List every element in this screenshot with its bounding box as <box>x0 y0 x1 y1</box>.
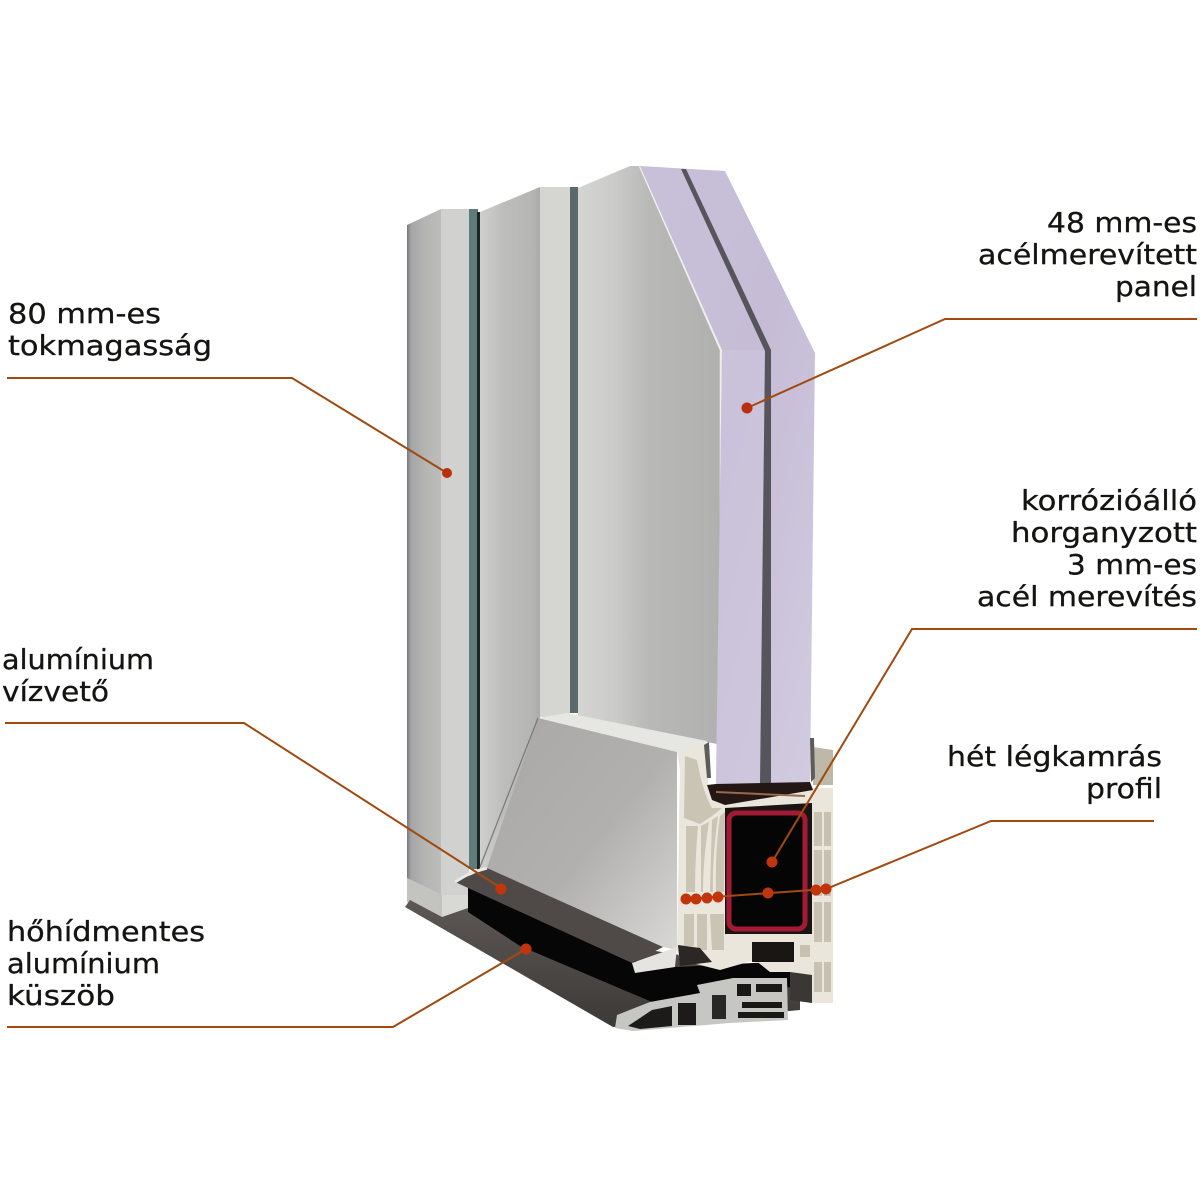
black shadow channel <box>468 884 810 1002</box>
callout: korrózióálló acél merevítés: horganyzott <box>1011 516 1197 549</box>
aluminium drip <box>455 868 677 973</box>
callout: 48 mm-es acélmerevített panel: 48 mm-es <box>1047 206 1197 239</box>
callout: hét légkamrás profil: profil <box>1086 772 1162 805</box>
callout: korrózióálló acél merevítés: acél merevítés <box>977 580 1197 613</box>
lower chambers <box>752 942 794 962</box>
callout: alumínium vízvető: alumínium <box>2 643 154 676</box>
panel white edge <box>640 166 721 745</box>
callout: alumínium vízvető <box>2 643 506 894</box>
door illustration <box>405 166 833 1031</box>
callout: korrózióálló acél merevítés <box>766 484 1197 868</box>
callout: 80 mm-es tokmagasság: tokmagasság <box>8 329 212 362</box>
callout: hőhídmentes alumínium küszöb <box>7 915 532 1027</box>
purple insulated panel core <box>640 166 815 785</box>
threshold sill <box>405 900 800 1027</box>
chambers right <box>814 812 831 992</box>
gasket <box>704 738 815 782</box>
chambers left <box>684 756 725 950</box>
callout: 80 mm-es tokmagasság <box>7 297 452 478</box>
callout: hét légkamrás profil <box>680 740 1162 904</box>
door panel front face <box>578 166 722 745</box>
callout: 48 mm-es acélmerevített panel: panel <box>1115 270 1197 303</box>
callout: korrózióálló acél merevítés: 3 mm-es <box>1067 548 1197 581</box>
glazing bead <box>480 713 707 950</box>
middle frame <box>480 187 578 880</box>
callout: alumínium vízvető: vízvető <box>2 675 109 708</box>
callout: korrózióálló acél merevítés: korrózióálló <box>1021 484 1197 517</box>
callout: hőhídmentes alumínium küszöb: küszöb <box>7 979 115 1012</box>
callout: 80 mm-es tokmagasság: 80 mm-es <box>8 297 161 330</box>
callout: hőhídmentes alumínium küszöb: hőhídmentes <box>7 915 205 948</box>
callout: 48 mm-es acélmerevített panel: acélmerevített <box>978 238 1197 271</box>
left frame post <box>407 209 480 917</box>
steel reinforcement <box>729 813 805 929</box>
lower sill section <box>615 978 788 1031</box>
callout: hét légkamrás profil: hét légkamrás <box>947 740 1162 773</box>
cut profile section <box>677 742 833 1003</box>
callout: hőhídmentes alumínium küszöb: alumínium <box>7 947 160 980</box>
callout: 48 mm-es acélmerevített panel <box>742 206 1197 414</box>
